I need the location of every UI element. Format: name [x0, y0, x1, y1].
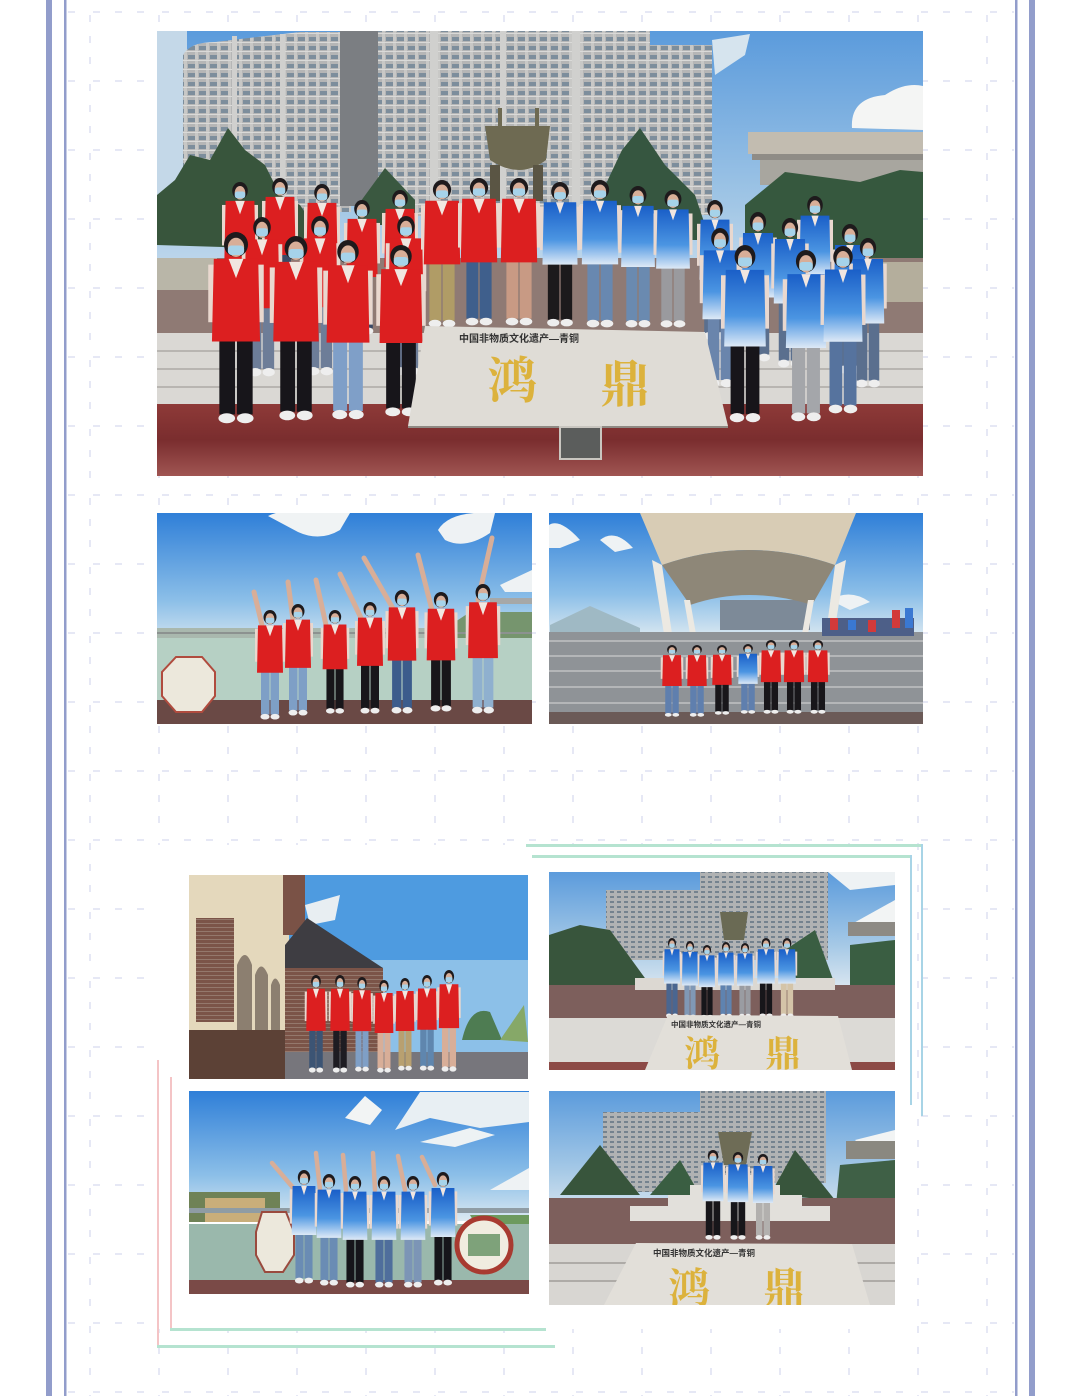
photo: blue vests by the lake — [189, 1091, 529, 1294]
distant crowd — [822, 608, 914, 636]
volunteers with raised arms — [272, 1153, 457, 1288]
stone slab with inscription: 中国非物质文化遗产—青铜 — [671, 1019, 761, 1029]
volunteers row — [663, 938, 797, 1019]
photo: red vests beside brick building — [189, 875, 528, 1079]
frame: bottom left double line — [157, 1060, 555, 1348]
stone slab with inscription — [645, 1015, 852, 1074]
round red sign right — [457, 1218, 511, 1272]
stone slab with inscription: 鼎 — [600, 357, 650, 413]
stone slab with inscription: 鼎 — [765, 1034, 801, 1074]
stone slab with inscription: 鸿 — [487, 353, 537, 409]
volunteers back rows — [222, 178, 887, 387]
volunteers row — [305, 970, 461, 1073]
octagon sign — [162, 657, 215, 712]
volunteers with raised arms — [254, 538, 500, 720]
stone slab with inscription: 鸿 — [668, 1266, 710, 1313]
photo: three volunteers at monument — [549, 1091, 895, 1313]
stone slab with inscription — [604, 1243, 870, 1313]
photo: large group at bronze monument — [157, 31, 923, 476]
bronze urn — [718, 1132, 752, 1165]
panel: white backing for lower collage — [157, 845, 910, 1329]
photo: red vests by the lake — [157, 513, 532, 724]
stepped plinth — [630, 1175, 830, 1221]
volunteers front row — [208, 228, 866, 423]
bronze urn — [720, 912, 748, 940]
photo: blue vests at monument — [549, 872, 895, 1074]
stone slab with inscription: 鼎 — [763, 1266, 805, 1313]
spotlight box — [560, 427, 601, 459]
stone slab with inscription — [408, 326, 728, 428]
photo: group on steps under canopy — [549, 513, 923, 724]
bronze cauldron — [485, 108, 550, 201]
volunteers standing centre — [421, 178, 692, 327]
stone slab with inscription: 鸿 — [684, 1034, 720, 1074]
stone slab with inscription: 中国非物质文化遗产—青铜 — [653, 1248, 755, 1258]
seated volunteers — [661, 640, 830, 717]
canopy — [640, 513, 856, 634]
octagon sign left — [256, 1212, 294, 1272]
frame: top right double line — [526, 844, 923, 1116]
three volunteers — [701, 1150, 775, 1240]
stone slab with inscription: 中国非物质文化遗产—青铜 — [459, 332, 579, 345]
